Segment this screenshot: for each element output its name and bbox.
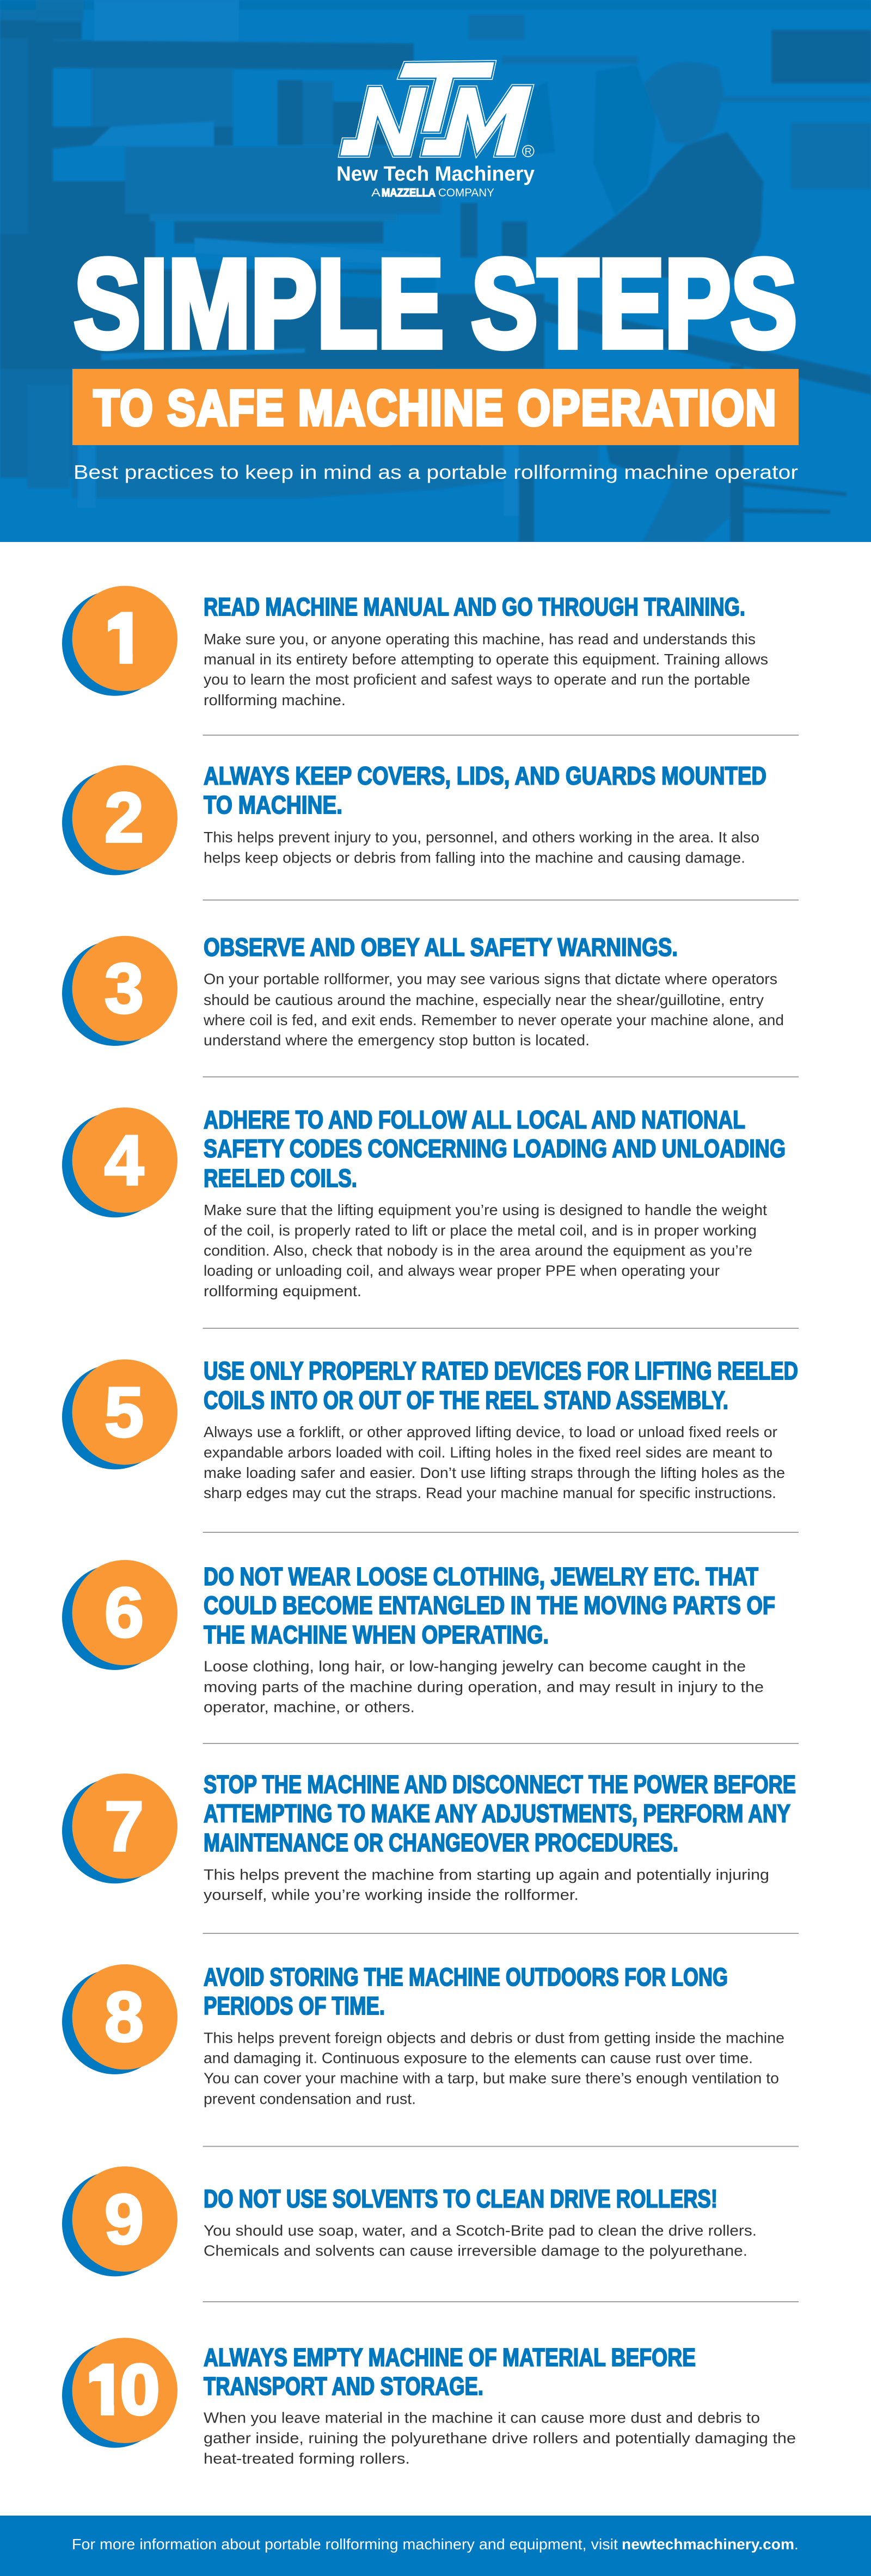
logo tagline: COMPANY: [438, 187, 494, 199]
number badge 2: 2: [105, 778, 144, 857]
body 4: rollforming equipment.: [204, 1283, 361, 1299]
number badge 4: [62, 1107, 177, 1217]
body 6: operator, machine, or others.: [204, 1699, 415, 1716]
body 4: Make sure that the lifting equipment you’re using is designed to handle the weight: [204, 1201, 767, 1218]
body 5: make loading safer and easier. Don’t use lifting straps through the lifting holes as the: [204, 1464, 785, 1481]
body 6: Loose clothing, long hair, or low-hanging jewelry can become caught in the: [204, 1657, 746, 1674]
step 4: [62, 1106, 786, 1299]
heading 2: TO MACHINE.: [204, 791, 342, 819]
number badge 9: [62, 2166, 177, 2276]
number badge 9: 9: [105, 2179, 144, 2259]
body 10: When you leave material in the machine it can cause more dust and debris to: [204, 2409, 760, 2426]
number badge 10: [62, 2338, 177, 2448]
body 3: On your portable rollformer, you may see various signs that dictate where operators: [204, 971, 777, 988]
body 1: [204, 631, 768, 708]
body 7: yourself, while you’re working inside the rollformer.: [204, 1887, 579, 1903]
step 2: [62, 762, 766, 875]
heading 6: THE MACHINE WHEN OPERATING.: [204, 1620, 549, 1649]
body 3: where coil is fed, and exit ends. Remember to never operate your machine alone, and: [203, 1012, 784, 1028]
number badge 6: [62, 1560, 177, 1670]
step 6: [62, 1560, 775, 1716]
body 9: [204, 2222, 757, 2259]
body 4: of the coil, is properly rated to lift or place the metal coil, and is in proper working: [204, 1222, 757, 1238]
body 3: [203, 971, 784, 1049]
body 6: [204, 1657, 764, 1716]
logo mark: R: [525, 146, 532, 157]
body 6: moving parts of the machine during operation, and may result in injury to the: [204, 1679, 764, 1696]
number badge 3: [62, 936, 177, 1046]
number badge 5: 5: [105, 1372, 144, 1452]
heading 2: [204, 762, 766, 819]
number badge 4: 4: [105, 1120, 144, 1200]
logo tagline: MAZZELLA: [382, 187, 436, 199]
number badge 10: 1: [86, 2350, 125, 2429]
body 9: Chemicals and solvents can cause irreversible damage to the polyurethane.: [204, 2242, 747, 2259]
heading 10: TRANSPORT AND STORAGE.: [204, 2372, 483, 2400]
body 5: sharp edges may cut the straps. Read your machine manual for specific instructions.: [204, 1484, 776, 1501]
number badge 7: 7: [105, 1786, 144, 1866]
body 10: heat-treated forming rollers.: [204, 2450, 410, 2467]
heading 7: [204, 1770, 796, 1857]
footer bar: [0, 2516, 871, 2576]
body 3: should be cautious around the machine, especially near the shear/guillotine, entry: [204, 991, 764, 1008]
tagline: Best practices to keep in mind as a portable rollforming machine operator: [73, 461, 798, 483]
footer text: For more information about portable rollforming machinery and equipment, visit: [72, 2536, 618, 2553]
step 10: [62, 2338, 796, 2467]
heading 9: DO NOT USE SOLVENTS TO CLEAN DRIVE ROLLERS!: [204, 2184, 717, 2213]
logo tagline: A: [371, 187, 381, 199]
body 2: [204, 829, 759, 866]
heading 5: [204, 1357, 798, 1414]
number badge 8: 8: [105, 1977, 144, 2056]
step 8: [62, 1963, 784, 2107]
body 8: You can cover your machine with a tarp, but make sure there’s enough ventilation to: [204, 2069, 779, 2086]
number badge 5: [62, 1359, 177, 1469]
body 5: Always use a forklift, or other approved lifting device, to load or unload fixed reels or: [204, 1423, 777, 1440]
body 9: You should use soap, water, and a Scotch-Brite pad to clean the drive rollers.: [204, 2222, 757, 2239]
heading 7: MAINTENANCE OR CHANGEOVER PROCEDURES.: [204, 1828, 678, 1857]
number badge 1: 1: [105, 598, 144, 677]
panel: header photo background: [0, 0, 871, 542]
number badge 10: 0: [120, 2350, 160, 2429]
heading 4: REELED COILS.: [204, 1164, 357, 1192]
heading 4: [204, 1106, 786, 1192]
body 10: [204, 2409, 796, 2467]
logo tagline: [371, 187, 494, 199]
subtitle banner: [72, 369, 799, 445]
body 4: loading or unloading coil, and always wear proper PPE when operating your: [204, 1262, 720, 1279]
body 4: condition. Also, check that nobody is in the area around the equipment as you’re: [204, 1242, 752, 1259]
body 1: rollforming machine.: [204, 692, 346, 708]
body 3: understand where the emergency stop button is located.: [204, 1032, 590, 1049]
logo mark: [340, 62, 534, 157]
heading 8: PERIODS OF TIME.: [204, 1992, 385, 2020]
body 7: [204, 1866, 769, 1903]
logo name: New Tech Machinery: [336, 163, 535, 186]
body 1: you to learn the most proficient and safest ways to operate and run the portable: [204, 671, 750, 688]
body 5: [204, 1423, 785, 1501]
heading 5: COILS INTO OR OUT OF THE REEL STAND ASSEMBLY.: [204, 1386, 728, 1414]
body 1: manual in its entirety before attempting to operate this equipment. Training allows: [204, 651, 768, 668]
footer text: .: [794, 2536, 799, 2553]
body 8: [204, 2029, 784, 2107]
body 5: expandable arbors loaded with coil. Lifting holes in the fixed reel sides are meant to: [204, 1444, 772, 1461]
body 2: helps keep objects or debris from falling into the machine and causing damage.: [204, 849, 745, 866]
heading 6: [204, 1562, 775, 1649]
heading 8: AVOID STORING THE MACHINE OUTDOORS FOR LONG: [204, 1963, 728, 1991]
heading 10: ALWAYS EMPTY MACHINE OF MATERIAL BEFORE: [204, 2343, 696, 2371]
number badge 1: [62, 586, 177, 696]
heading 4: ADHERE TO AND FOLLOW ALL LOCAL AND NATIONAL: [204, 1106, 745, 1134]
number badge 2: [62, 765, 177, 875]
step 7: [62, 1770, 796, 1903]
heading 3: OBSERVE AND OBEY ALL SAFETY WARNINGS.: [204, 933, 678, 962]
number badge 7: [62, 1773, 177, 1883]
footer text: newtechmachinery.com: [622, 2536, 794, 2553]
body 8: and damaging it. Continuous exposure to the elements can cause rust over time.: [204, 2049, 753, 2066]
heading 8: [204, 1963, 728, 2020]
step 3: [62, 933, 784, 1049]
body 10: gather inside, ruining the polyurethane drive rollers and potentially damaging the: [204, 2430, 796, 2446]
step 1: [62, 586, 768, 708]
step 5: [62, 1357, 798, 1501]
body 2: This helps prevent injury to you, personnel, and others working in the area. It also: [204, 829, 759, 846]
number badge 8: [62, 1964, 177, 2074]
number badge 3: 3: [105, 948, 144, 1028]
heading 2: ALWAYS KEEP COVERS, LIDS, AND GUARDS MOUNTED: [204, 762, 766, 790]
body 8: prevent condensation and rust.: [204, 2091, 416, 2107]
body 7: This helps prevent the machine from starting up again and potentially injuring: [204, 1866, 769, 1883]
body 8: This helps prevent foreign objects and debris or dust from getting inside the machine: [204, 2029, 784, 2046]
number badge 6: 6: [105, 1573, 144, 1652]
step 9: [62, 2166, 757, 2276]
body 4: [204, 1201, 767, 1299]
body 1: Make sure you, or anyone operating this machine, has read and understands this: [204, 631, 756, 648]
logo: New Tech Machinery NTM: [336, 62, 535, 199]
heading 10: [204, 2343, 696, 2400]
